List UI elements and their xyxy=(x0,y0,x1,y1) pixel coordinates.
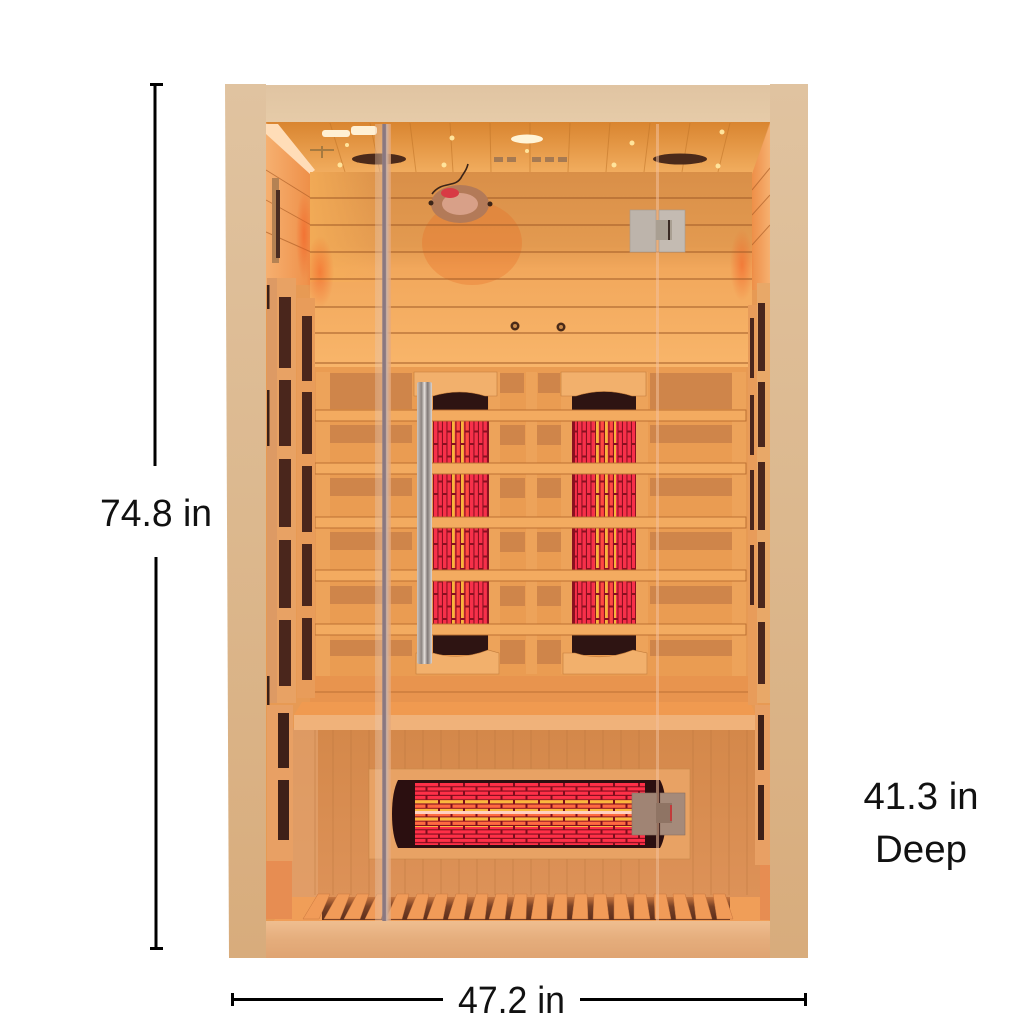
depth label xyxy=(864,776,978,871)
width label: 47.2 in xyxy=(458,980,565,1022)
right side window panels xyxy=(748,283,770,920)
right vertical heater xyxy=(572,391,636,655)
bench xyxy=(294,676,756,730)
right glass door edge xyxy=(656,124,659,924)
top frame beam xyxy=(262,85,774,122)
interior base xyxy=(262,120,774,925)
lower horizontal heater xyxy=(369,769,690,859)
depth label: 41.3 in xyxy=(864,776,978,818)
bottom frame beam xyxy=(262,921,774,958)
depth label: Deep xyxy=(875,829,967,871)
height label: 74.8 in xyxy=(100,493,212,535)
lower glass hinge xyxy=(632,793,685,835)
reading light dome xyxy=(428,164,492,223)
sauna cabin photo xyxy=(225,84,808,958)
ceiling xyxy=(266,122,770,174)
floor and foot slats xyxy=(272,894,770,923)
door handle xyxy=(417,382,432,664)
right frame post xyxy=(770,84,808,958)
right side wall xyxy=(752,124,770,290)
upper back wall planks xyxy=(306,172,754,367)
backrest slats xyxy=(315,410,746,635)
lower wall behind bench xyxy=(292,728,762,898)
glass door edge bar xyxy=(375,124,391,921)
height dimension line xyxy=(150,83,163,950)
left vertical heater xyxy=(433,391,489,655)
left side wall xyxy=(266,124,315,285)
width dimension line xyxy=(231,993,807,1006)
lower back panel with backrest xyxy=(316,367,746,682)
left frame post xyxy=(225,84,266,958)
upper glass hinge xyxy=(630,210,685,252)
heater wooden caps xyxy=(414,372,647,674)
left side window panels xyxy=(266,278,315,919)
